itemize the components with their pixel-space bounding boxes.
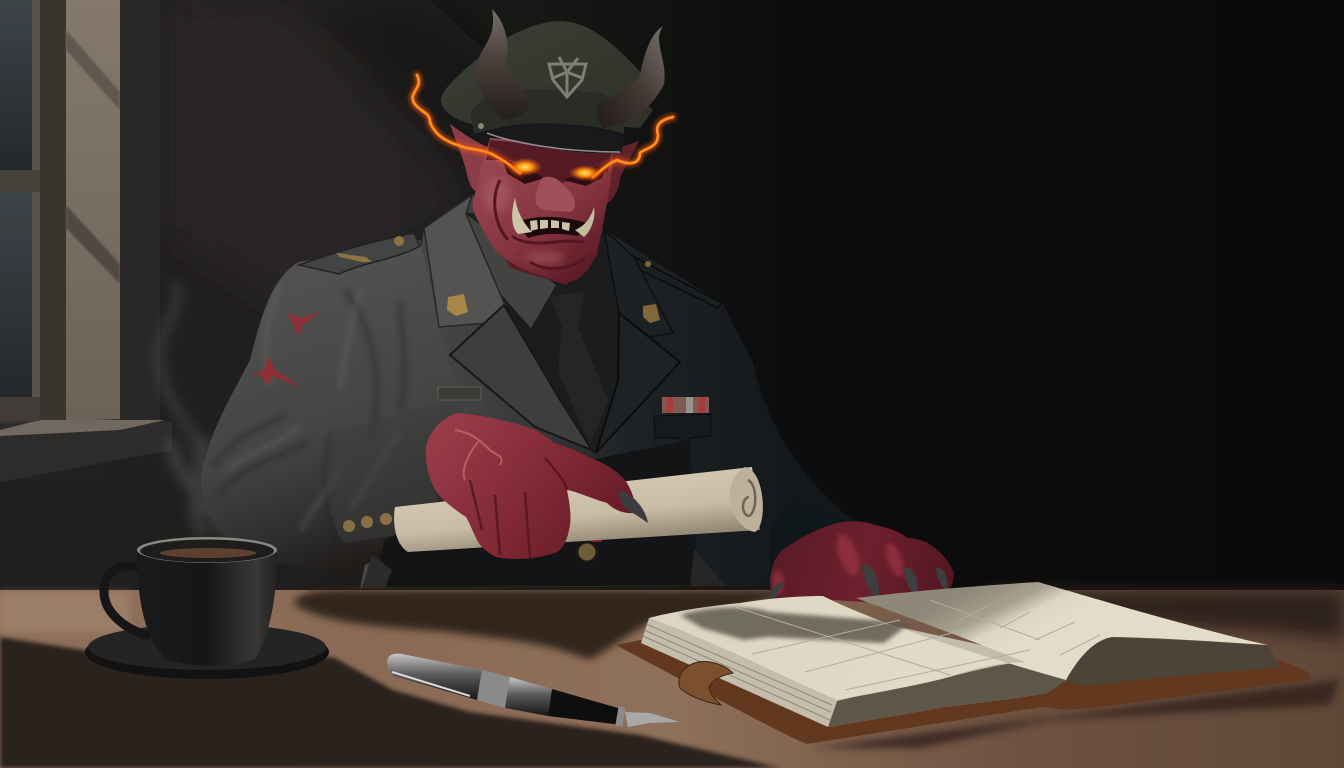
pen clip bbox=[392, 672, 470, 696]
left sleeve bbox=[201, 240, 470, 572]
left horn bbox=[475, 9, 530, 120]
left collar bbox=[424, 195, 505, 327]
left ear bbox=[450, 124, 495, 194]
coat front bbox=[372, 440, 698, 588]
sleeve scars bbox=[248, 312, 320, 388]
lit wall bbox=[66, 0, 120, 422]
right page bbox=[856, 582, 1268, 680]
collar badge left bbox=[447, 294, 468, 316]
window bbox=[0, 0, 172, 482]
cup body bbox=[137, 552, 277, 666]
necktie bbox=[550, 292, 608, 445]
page block left bbox=[641, 610, 1066, 727]
desk bbox=[0, 590, 1344, 768]
neck bbox=[478, 205, 600, 285]
side gap right bbox=[690, 548, 725, 586]
brow bbox=[486, 140, 612, 186]
window frame bbox=[0, 0, 66, 425]
page block right bbox=[1066, 637, 1280, 686]
sleeve folds bbox=[214, 285, 404, 543]
dark foreground shadow bbox=[0, 637, 780, 768]
right ear bbox=[600, 141, 639, 205]
page ruled lines bbox=[735, 600, 1100, 690]
left cuff edge bbox=[326, 403, 458, 543]
epaulette right bbox=[634, 257, 722, 308]
cap emblem bbox=[549, 57, 586, 97]
shadow on left page bbox=[680, 607, 910, 643]
figure shadow on desk bbox=[293, 590, 800, 660]
left lapel bbox=[450, 305, 592, 450]
shirt collar left bbox=[464, 212, 556, 328]
window glass bbox=[0, 0, 32, 397]
coffee bbox=[160, 548, 256, 558]
glowing eyes bbox=[508, 158, 601, 181]
finger highlights bbox=[772, 531, 908, 594]
page edges dark left bbox=[828, 662, 1066, 727]
right desk shade bbox=[960, 590, 1344, 640]
scroll and right hand bbox=[394, 413, 763, 559]
mouth bbox=[516, 217, 590, 238]
cheek highlight bbox=[483, 177, 565, 264]
uniform coat bbox=[360, 195, 855, 588]
book shadow bbox=[810, 680, 1340, 748]
dark pillar bbox=[120, 0, 160, 422]
side gap left bbox=[362, 555, 392, 588]
collar badge right bbox=[643, 304, 660, 323]
right lapel bbox=[596, 313, 680, 453]
chin strap button bbox=[478, 123, 484, 129]
officer cap bbox=[441, 21, 653, 153]
face bbox=[472, 138, 612, 282]
hand on scroll bbox=[426, 413, 648, 559]
epaulette left bbox=[299, 233, 420, 274]
left page bbox=[649, 596, 1066, 700]
claws bbox=[770, 565, 948, 602]
name plate bbox=[438, 387, 481, 400]
demon torso bbox=[201, 195, 855, 588]
teeth bbox=[530, 220, 570, 231]
claw bbox=[619, 490, 648, 523]
right tusk bbox=[575, 207, 594, 237]
left tusk bbox=[512, 198, 532, 234]
window light beam bbox=[170, 0, 560, 320]
cuff of right sleeve bbox=[770, 500, 855, 586]
right collar bbox=[604, 230, 673, 337]
veins and knuckles bbox=[455, 430, 567, 558]
demon head bbox=[450, 124, 639, 282]
sleeve cuff buttons bbox=[343, 513, 392, 532]
horns bbox=[475, 9, 665, 128]
leather cover bbox=[616, 640, 1310, 744]
scroll bbox=[394, 467, 763, 552]
shirt and chest bbox=[464, 212, 650, 455]
coat button bbox=[577, 542, 597, 562]
chest pocket bbox=[654, 414, 711, 446]
left hand on desk bbox=[770, 500, 954, 603]
cap visor bbox=[485, 123, 624, 153]
medal ribbon bbox=[662, 397, 709, 413]
saucer bbox=[85, 625, 329, 679]
notebook bbox=[616, 582, 1310, 744]
red lining bbox=[588, 530, 602, 542]
coffee cup bbox=[85, 537, 329, 679]
desk sheen bbox=[0, 592, 130, 632]
strap bbox=[679, 662, 733, 705]
cup handle bbox=[104, 566, 150, 636]
lip folds bbox=[495, 180, 585, 268]
right horn bbox=[597, 26, 665, 128]
page stack lines bbox=[643, 624, 832, 720]
cap crown bbox=[441, 21, 653, 128]
window sill bbox=[0, 419, 172, 482]
steam bbox=[160, 285, 222, 535]
cap band bbox=[470, 89, 624, 134]
eye sockets bbox=[500, 156, 608, 186]
nose bbox=[536, 177, 575, 212]
flames bbox=[413, 75, 673, 177]
fountain pen bbox=[387, 654, 680, 727]
